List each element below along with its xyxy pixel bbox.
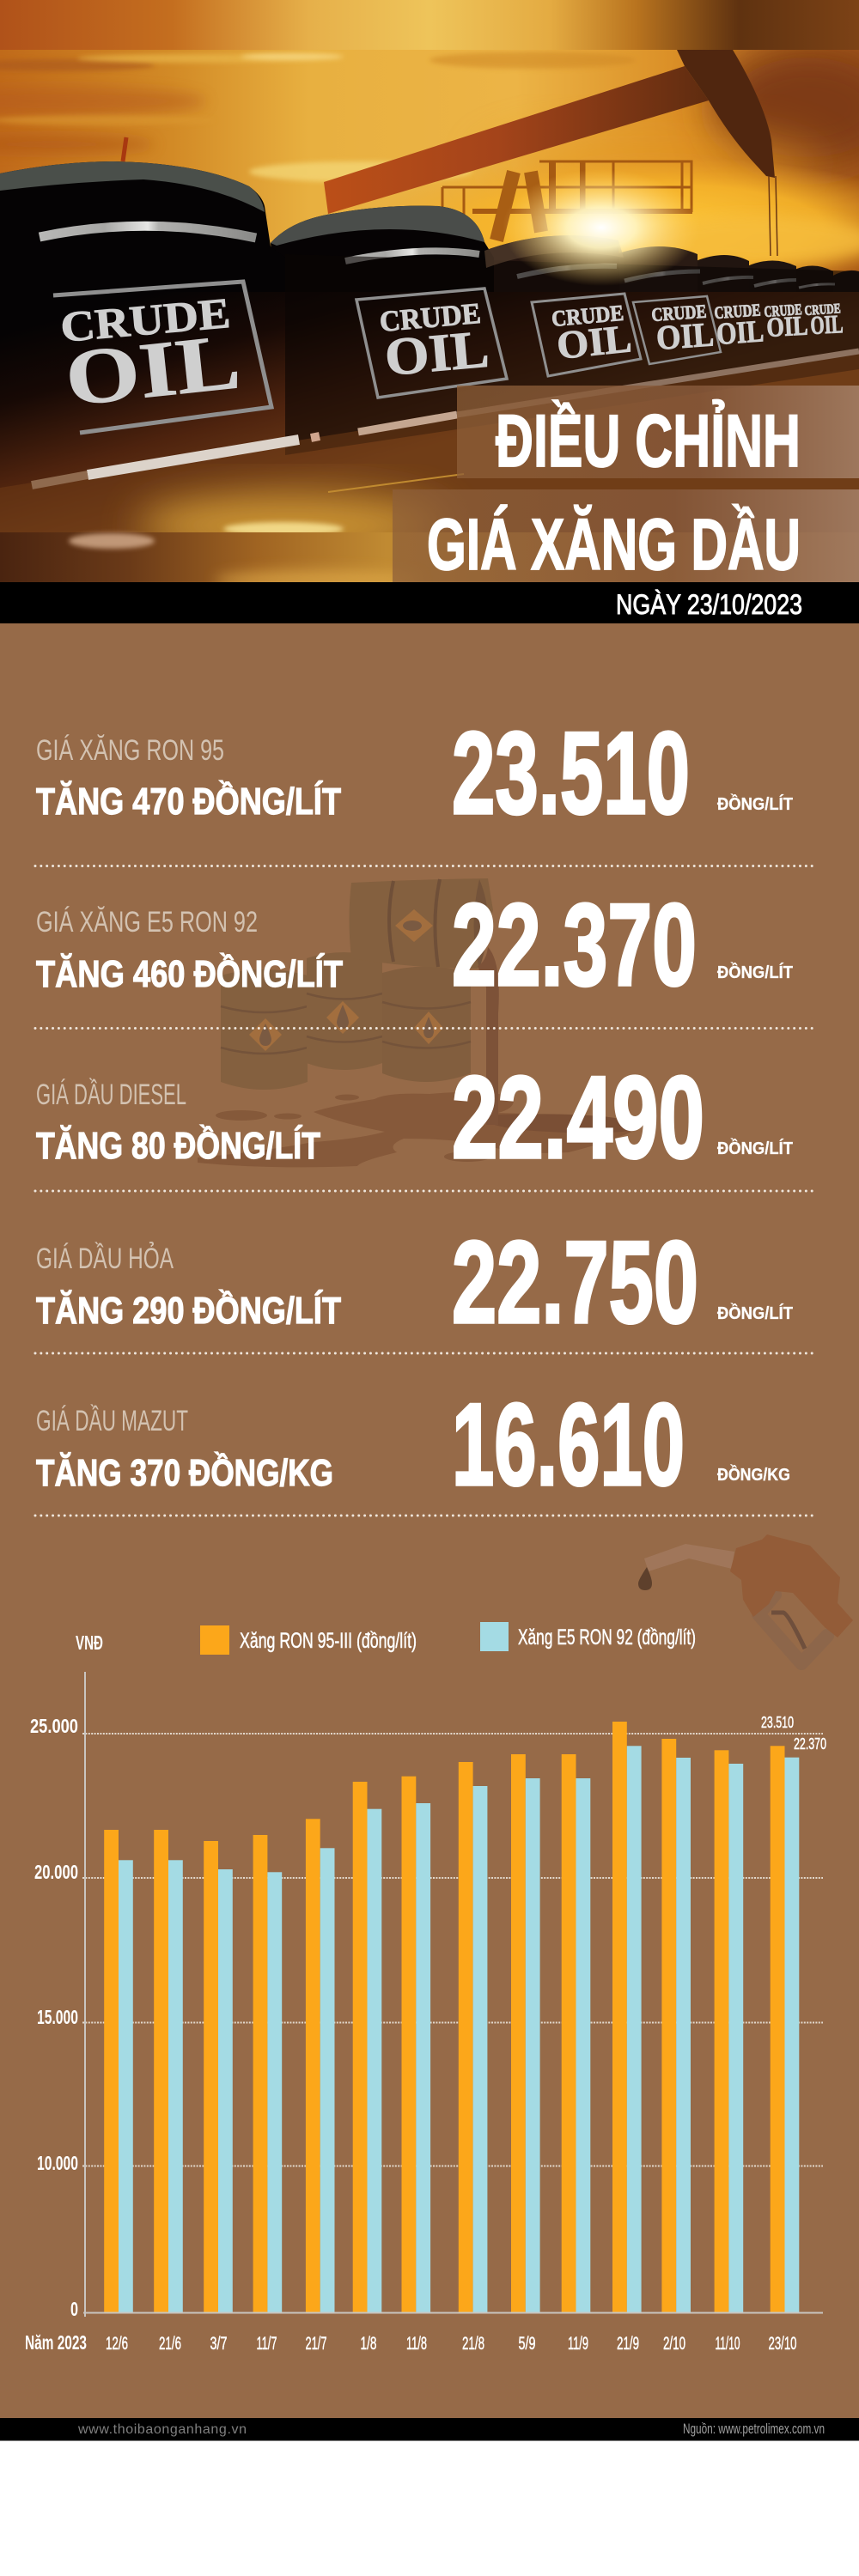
barrel 1 [0,161,285,507]
price: 16.610 [452,1379,685,1510]
panel: brown background [0,623,859,2418]
top blurred band [0,0,859,50]
change: TĂNG 80 ĐỒNG/LÍT [36,1124,320,1167]
trigger guard [758,1595,827,1663]
drop [638,1567,652,1590]
barrel labels: crude oil far row: OIL [655,314,715,357]
barrel label: crude oil 1: CRUDE [58,289,232,351]
change: TĂNG 470 ĐỒNG/LÍT [36,780,341,823]
x axis labels: 3/7 [210,2334,227,2354]
handle body [730,1534,853,1637]
unit: ĐỒNG/LÍT [717,1138,793,1158]
x axis labels: 11/10 [715,2334,740,2354]
barrel label: crude oil 1: OIL [61,317,244,422]
grid lines [82,1734,823,2166]
oil stream [478,947,499,1125]
change: TĂNG 370 ĐỒNG/KG [36,1451,333,1494]
label: GIÁ XĂNG RON 95 [36,734,224,767]
legend: RON 95-III: Xăng RON 95-III (đồng/lít) [240,1629,417,1653]
x axis labels: 21/9 [617,2334,639,2354]
barrel label: crude oil 2: OIL [382,320,491,387]
price row 3: diesel [36,1052,793,1182]
value labels [761,1714,826,1753]
value labels: 22.370 [794,1735,826,1753]
panel: hero photo of crude oil barrels [0,0,859,591]
barrel label: crude oil 3: CRUDE [551,301,624,331]
axes [83,1672,823,2317]
x axis labels: 2/10 [663,2334,685,2354]
barrel labels: crude oil far row: OIL [810,310,844,340]
date bar [0,582,859,623]
pumpjack arm and head [324,50,777,256]
barrels lower gradient [0,292,859,584]
price row 1: RON 95 [36,708,793,838]
right barrel [382,967,471,1082]
y axis labels: 15.000 [37,2006,78,2028]
barrel 4 [616,246,698,412]
barrel 3 [484,235,624,429]
right barrels dark mask [285,254,859,455]
barrel labels: crude oil far row: OIL [716,313,765,351]
change: TĂNG 460 ĐỒNG/LÍT [36,952,343,995]
oil puddle [198,1092,636,1167]
x axis labels: 21/6 [159,2334,181,2354]
chart legend [76,1622,696,1655]
price: 22.370 [452,879,697,1010]
sky glow and cloud streaks [0,43,859,294]
date bar: NGÀY 23/10/2023 [616,589,802,620]
barrel label: crude oil 3 [532,294,641,376]
sun flare [503,169,700,286]
price row 5: mazut [36,1379,790,1510]
value labels: 23.510 [761,1714,794,1731]
label: GIÁ DẦU DIESEL [36,1078,186,1111]
icon: fuel nozzle with drop [638,1534,853,1663]
x axis labels: 23/10 [768,2334,797,2354]
website: www.thoibaonganhang.vn [77,2422,247,2437]
blue bars: E5 RON 92 [119,1746,799,2313]
y axis labels: 20.000 [34,1861,78,1883]
label: GIÁ DẦU MAZUT [36,1405,188,1437]
change: TĂNG 290 ĐỒNG/LÍT [36,1289,341,1332]
y axis labels: 25.000 [30,1715,78,1737]
x axis labels: 21/8 [462,2334,484,2354]
barrel label: crude oil 1 [53,282,271,433]
sun-washed barrel tops [484,235,624,268]
barrel 6 [747,261,796,386]
rim strip across barrels [32,351,859,492]
barrel 5 [696,255,749,395]
x axis labels: 12/6 [106,2334,128,2354]
tipped barrel [349,878,493,969]
silver rim strips [40,226,835,288]
barrel 7 [795,265,833,378]
price: 22.490 [452,1052,704,1182]
lower blurred band [0,532,859,591]
barrel antenna [123,137,126,161]
y axis labels [30,1715,78,2320]
x axis labels: 5/9 [519,2334,536,2354]
x axis labels: 1/8 [361,2334,376,2354]
price row 4: kerosene [36,1217,793,1347]
barrel labels: crude oil far row: OIL [765,310,808,343]
x axis labels: 11/8 [406,2334,427,2354]
price row 2: E5 RON 92 [36,879,793,1010]
barrel label: crude oil 3: OIL [555,316,634,368]
unit: ĐỒNG/LÍT [717,1303,793,1323]
barrel 2 [271,206,494,481]
price: 22.750 [452,1217,698,1347]
unit: ĐỒNG/KG [717,1464,790,1485]
floor glow [0,351,859,556]
label: GIÁ XĂNG E5 RON 92 [36,906,258,939]
left barrel [221,969,308,1090]
x axis labels: 21/7 [306,2334,326,2354]
bar chart: petrol prices 2023 [25,1672,826,2354]
spout [644,1544,734,1571]
unit label: VNĐ [76,1631,103,1654]
lever [771,1613,805,1649]
unit: ĐỒNG/LÍT [717,793,793,814]
barrel labels: crude oil far row: CRUDE [764,301,802,320]
legend: E5 RON 92 [480,1622,696,1651]
unit: ĐỒNG/LÍT [717,962,793,982]
barrel labels: crude oil far row: CRUDE [651,301,707,325]
label: GIÁ DẦU HỎA [36,1242,174,1275]
x axis labels [106,2334,797,2354]
pumpjack platform [442,161,692,240]
y axis labels: 0 [70,2298,78,2320]
y axis labels: 10.000 [37,2152,78,2174]
price: 23.510 [452,708,690,838]
barrel label: crude oil 2 [356,289,507,398]
x axis labels: 11/7 [256,2334,277,2354]
barrel labels: crude oil far row [633,296,844,364]
middle barrel [307,952,382,1070]
orange bars: RON 95-III [104,1722,784,2313]
barrels row [0,161,859,584]
barrel 8 [832,270,859,378]
illustration: spilled oil barrels [198,878,636,1167]
barrel labels: crude oil far row: CRUDE [804,301,841,319]
x axis labels: 11/9 [568,2334,588,2354]
footer bar [0,2418,859,2440]
x axis year label: Năm 2023 [25,2331,87,2354]
barrel label: crude oil 2: CRUDE [378,298,482,338]
barrel labels: crude oil far row: CRUDE [714,301,761,323]
legend: E5 RON 92: Xăng E5 RON 92 (đồng/lít) [518,1625,696,1649]
legend: RON 95-III [200,1625,417,1655]
